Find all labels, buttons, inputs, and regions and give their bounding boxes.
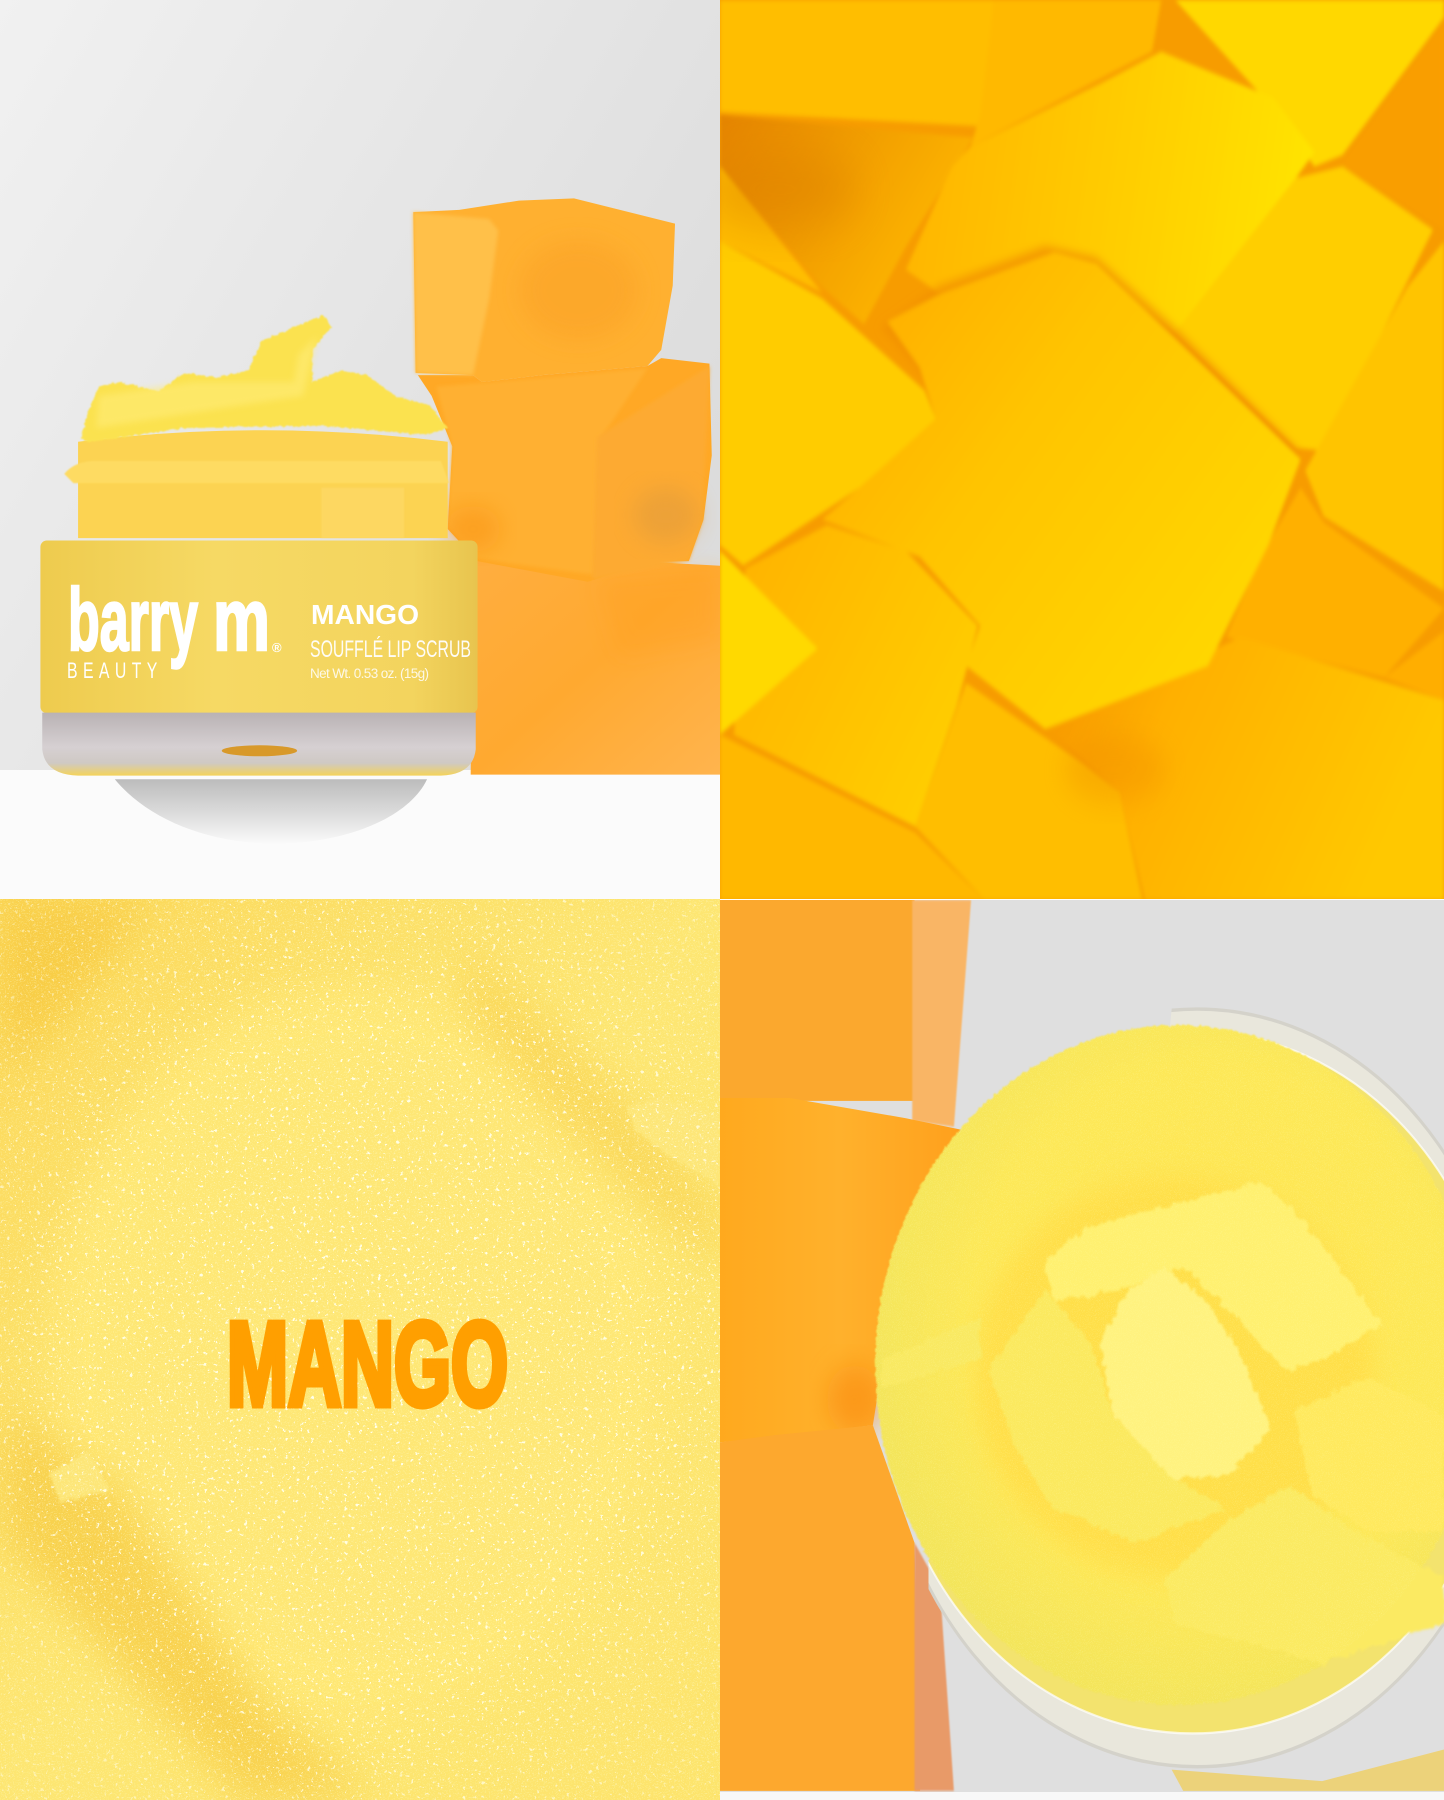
brand wordmark: m xyxy=(213,570,270,669)
cube: right shadow corner xyxy=(1342,23,1444,230)
bottom white strip xyxy=(720,1792,1444,1800)
jar rim thread xyxy=(64,461,449,483)
texture base xyxy=(0,899,720,1800)
glass jar rim xyxy=(882,1009,1444,1767)
cube: lower right corner xyxy=(1384,631,1444,700)
cube: large centre xyxy=(822,253,1301,729)
swirl: lower fold xyxy=(1165,1485,1444,1663)
net weight: Net Wt. 0.53 oz. (15g) xyxy=(310,666,429,681)
swirl: upper fold xyxy=(1044,1181,1382,1371)
cube: left large xyxy=(720,241,936,565)
scrub chunk: left xyxy=(49,1452,112,1502)
mango cube: upper xyxy=(720,900,915,1101)
mango peel: lower xyxy=(915,1543,954,1791)
cube: top middle xyxy=(971,0,1161,146)
cube: bottom left xyxy=(720,735,985,900)
panel base colour xyxy=(720,0,1444,899)
panel: scrub texture with mango title xyxy=(0,898,720,1800)
soft shadow at lower joint xyxy=(1064,735,1166,804)
dark band: lower diagonal xyxy=(0,1408,372,1800)
cube: lower left xyxy=(734,525,978,827)
swirl: right fold xyxy=(1294,1376,1444,1531)
product name: MANGO xyxy=(311,599,419,630)
mango cube mosaic xyxy=(701,0,1444,900)
panel: mango flesh close-up xyxy=(701,0,1444,900)
swirl: left fold xyxy=(989,1290,1225,1543)
cube: top left xyxy=(720,0,994,126)
mango cube: top xyxy=(413,198,675,382)
cube: large centre shadow xyxy=(880,246,1301,517)
swirl shade xyxy=(975,1176,1373,1577)
cube: upper centre xyxy=(906,52,1315,333)
brand subline: BEAUTY xyxy=(67,660,163,684)
cube: top right xyxy=(1175,0,1444,166)
dark band: upper right xyxy=(466,950,719,1267)
jar neck xyxy=(78,430,448,538)
jar shadow on shelf xyxy=(115,779,427,836)
cube: shaded upper left xyxy=(720,115,973,324)
scrub heap xyxy=(80,315,448,442)
cube: left edge small xyxy=(720,551,818,735)
product type: SOUFFLÉ LIP SCRUB xyxy=(310,636,471,663)
brand wordmark: barry xyxy=(68,570,198,669)
white shelf xyxy=(0,770,471,772)
studio wall background xyxy=(0,0,720,772)
mango cube: bottom xyxy=(471,554,720,775)
texture bands and folds xyxy=(0,898,719,1800)
top view artwork xyxy=(720,900,1444,1791)
mango shadow xyxy=(827,1365,882,1434)
jar base indent xyxy=(222,745,297,756)
jar glass base xyxy=(42,713,476,776)
scrub disc xyxy=(875,1025,1444,1705)
heading: MANGO: MANGO xyxy=(227,1298,508,1431)
cube: bottom middle xyxy=(915,683,1143,900)
fine sugar grain xyxy=(0,899,720,1800)
cube: right middle xyxy=(1175,166,1433,451)
jar base below rim xyxy=(1172,1750,1444,1791)
mango cube: middle xyxy=(418,358,712,582)
image group: stack of mango cubes and jar xyxy=(40,198,720,844)
swirl: outer crescent xyxy=(882,1319,979,1388)
registered mark: ® xyxy=(272,640,282,655)
studio background xyxy=(720,900,1444,1800)
mango peel: upper xyxy=(912,900,971,1127)
mango cube: middle xyxy=(720,1098,961,1442)
light centre swirl xyxy=(51,986,656,1713)
soft shadow at cube joints xyxy=(701,149,859,230)
cube: right lower xyxy=(1226,488,1444,677)
panel: product jar with mango cubes xyxy=(0,0,720,899)
panel: open jar top view with mango xyxy=(720,900,1444,1800)
cube: bottom right xyxy=(1050,637,1444,900)
scrub chunk: right xyxy=(626,1097,719,1185)
swirl: centre xyxy=(1100,1267,1271,1480)
scrub grain xyxy=(873,1021,1444,1709)
dark band: upper left xyxy=(0,898,154,1074)
white sugar sparkles xyxy=(0,899,720,1800)
mango cube: lower xyxy=(720,1425,920,1791)
jar body xyxy=(40,540,478,713)
jar label text xyxy=(68,584,470,681)
cube: far right xyxy=(1305,241,1444,591)
cube: upper left wedge xyxy=(720,166,822,293)
